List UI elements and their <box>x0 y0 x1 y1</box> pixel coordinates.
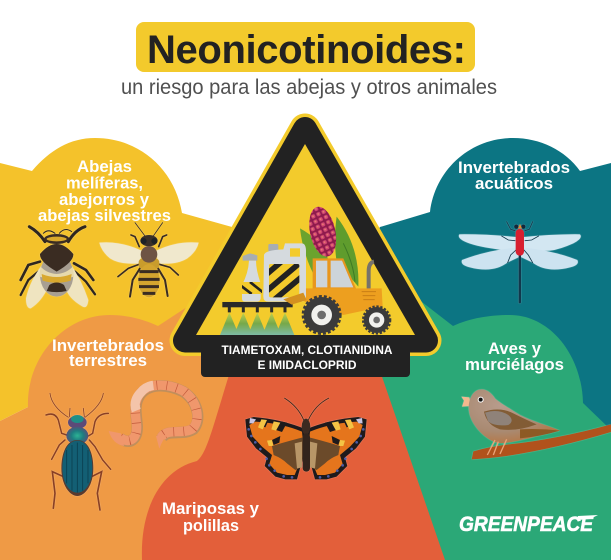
substance label bar <box>201 335 410 377</box>
label: invertebrados terrestres: Invertebrados <box>52 336 164 355</box>
panel: mariposas y polillas (red) <box>142 365 445 560</box>
logo: Greenpeace: GREENPEACE <box>459 513 594 536</box>
icon: dragonfly <box>459 222 581 303</box>
panel: abejas (yellow) <box>0 138 300 421</box>
label: invertebrados acuáticos: Invertebrados <box>458 158 570 177</box>
icon: ground beetle <box>46 393 111 510</box>
label: mariposas y polillas: polillas <box>183 516 239 535</box>
icon: butterfly <box>245 398 367 479</box>
label: abejas: Abejas <box>77 157 132 176</box>
panel: invertebrados acuáticos (teal) <box>340 138 611 430</box>
label: mariposas y polillas: Mariposas y <box>162 499 260 518</box>
title block <box>136 22 475 72</box>
substance names: TIAMETOXAM, CLOTIANIDINA <box>222 345 392 357</box>
icon: bumblebee <box>21 227 95 308</box>
substance names <box>222 345 392 372</box>
label: invertebrados acuáticos <box>458 158 570 193</box>
label: aves y murciélagos: murciélagos <box>465 355 564 374</box>
subtitle: un riesgo para las abejas y otros animales <box>121 76 497 99</box>
substance names: E IMIDACLOPRID <box>258 360 356 372</box>
icon: spray boom <box>220 293 307 335</box>
panel: invertebrados terrestres (orange) <box>0 305 290 560</box>
panel: aves y murciélagos (green) <box>370 285 611 560</box>
icon: spray bottle <box>242 253 262 302</box>
title: Neonicotinoides: <box>147 28 466 72</box>
icon: jerry can <box>263 243 306 302</box>
label: abejas: abejas silvestres <box>38 206 171 225</box>
icon: corn <box>300 204 358 287</box>
label: abejas <box>38 157 171 225</box>
warning triangle <box>185 129 426 340</box>
icon: honey bee <box>99 223 199 297</box>
label: invertebrados terrestres: terrestres <box>69 351 147 370</box>
label: aves y murciélagos: Aves y <box>488 339 542 358</box>
label: abejas: abejorros y <box>59 190 150 209</box>
label: aves y murciélagos <box>465 339 564 374</box>
label: mariposas y polillas <box>162 499 260 535</box>
label: invertebrados acuáticos: acuáticos <box>475 174 553 193</box>
icon: tractor <box>293 258 390 334</box>
icon: earthworm <box>109 385 198 449</box>
label: abejas: melíferas, <box>66 174 143 192</box>
icon: bird on branch <box>461 389 611 459</box>
label: invertebrados terrestres <box>52 336 164 370</box>
